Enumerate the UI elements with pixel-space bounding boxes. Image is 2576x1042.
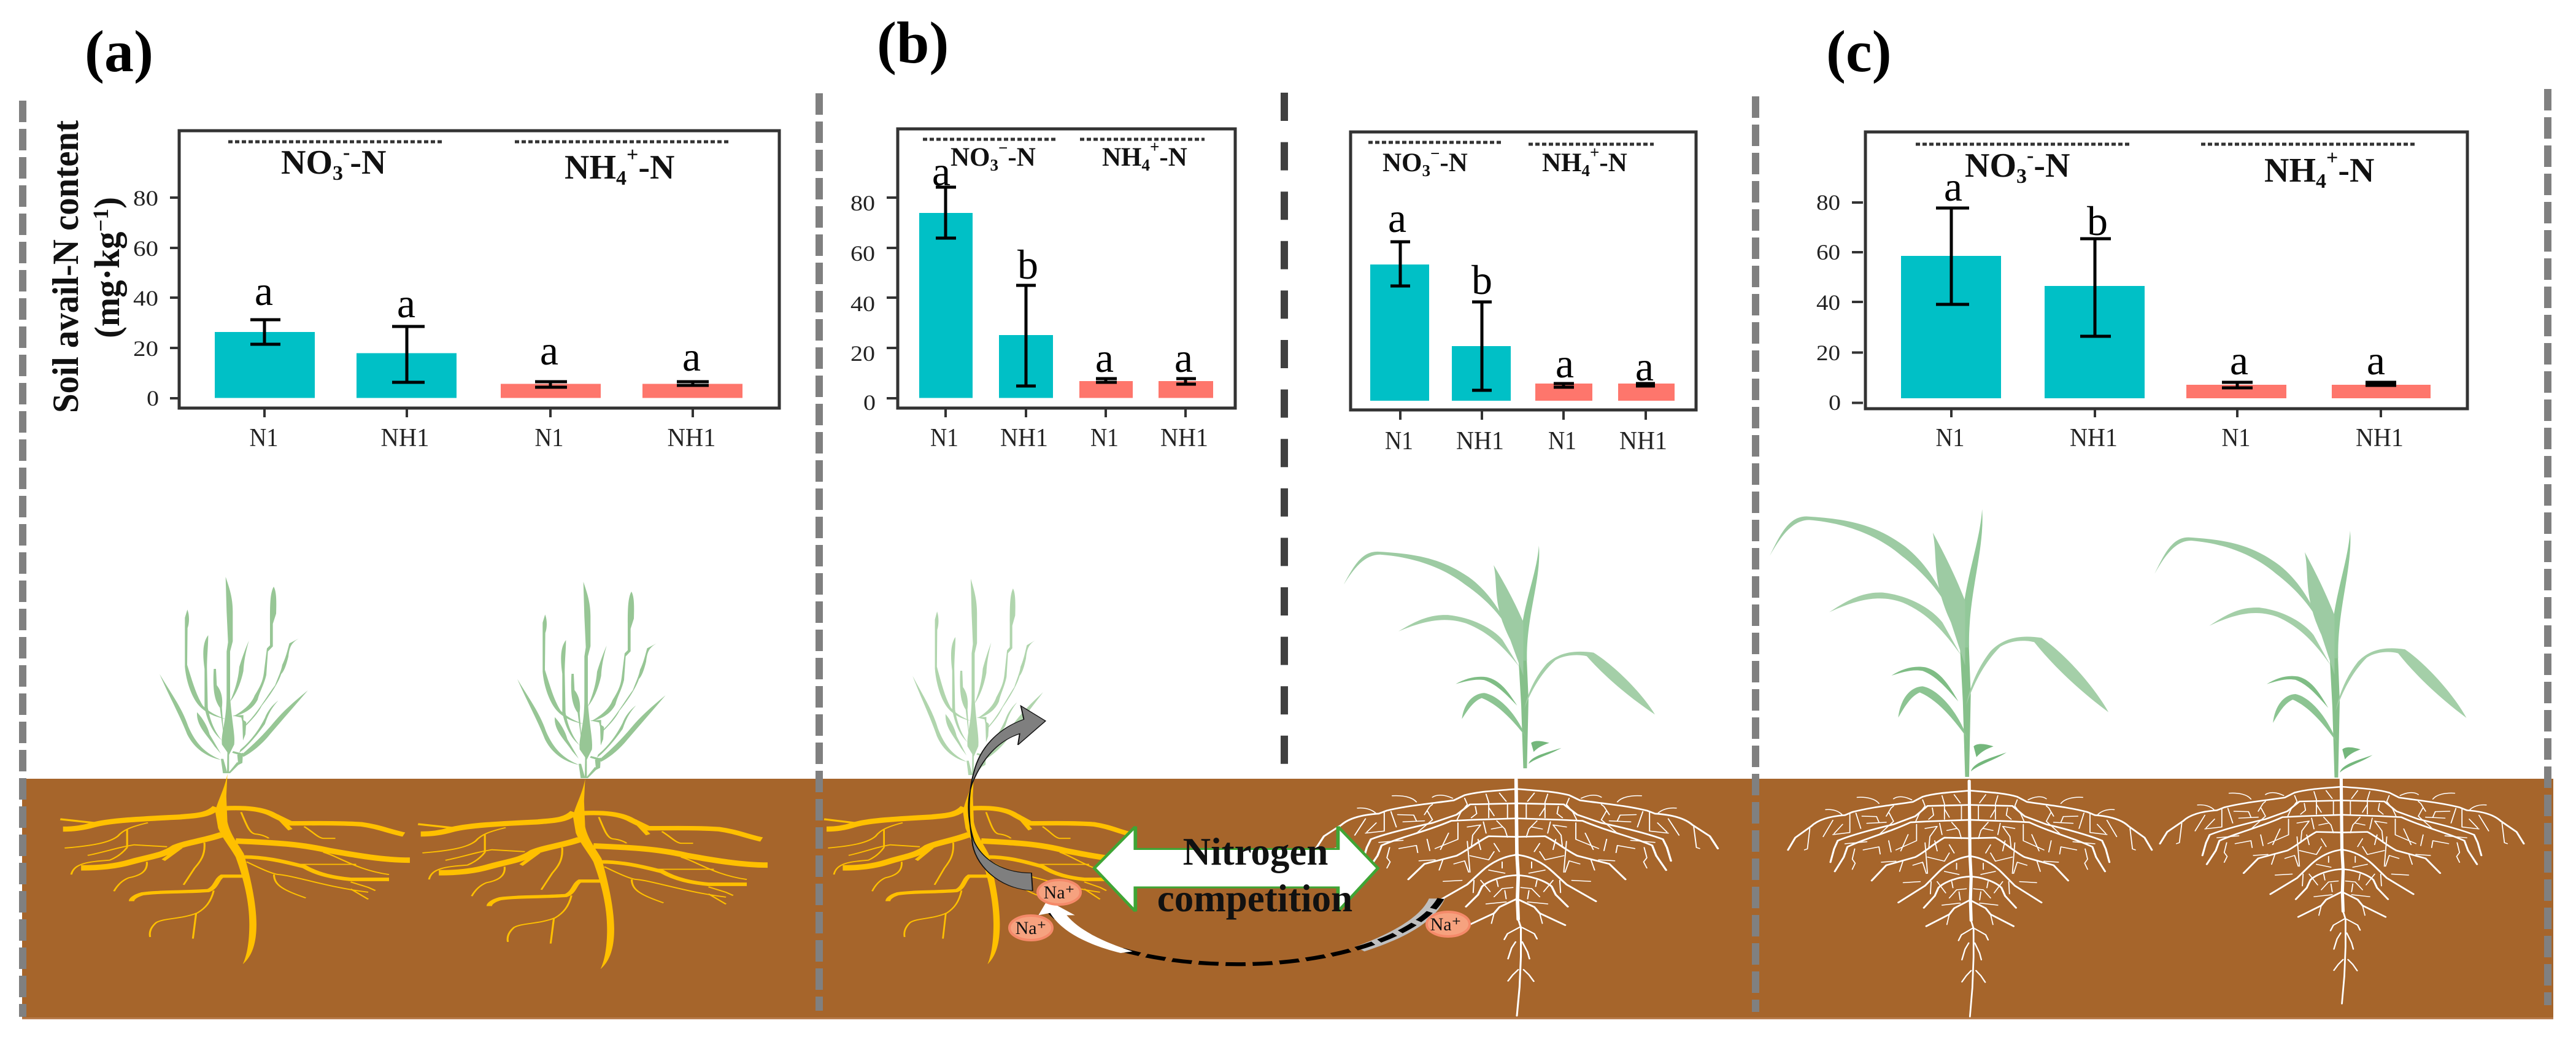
- bar chart: panel b right: [1351, 132, 1696, 455]
- y axis ticks and numbers: 60: [1816, 240, 1840, 264]
- group label: nitrate: NO: [1965, 147, 2016, 185]
- significance letters: [1944, 163, 2385, 384]
- y axis ticks and numbers: 60: [133, 236, 158, 261]
- y axis ticks and numbers: 20: [133, 336, 158, 361]
- plant: grass root left: [60, 774, 410, 964]
- significance letters: [1388, 195, 1654, 390]
- x axis ticks and labels: [249, 408, 715, 452]
- plant: maize root: [1316, 779, 1718, 1016]
- group label: nitrate: −: [998, 139, 1008, 157]
- group label: nitrate: 3: [2016, 165, 2027, 188]
- significance letters: a: [1388, 195, 1406, 241]
- group label: nitrate: NO: [281, 144, 333, 182]
- y axis ticks and numbers: 40: [1816, 290, 1840, 315]
- significance letters: b: [1017, 241, 1038, 288]
- panel c: maize plants: [1770, 509, 2524, 1017]
- group label: ammonium: -N: [1599, 149, 1627, 177]
- x axis ticks and labels: NH1: [1619, 427, 1667, 455]
- group label: ammonium: +: [1590, 143, 1599, 161]
- plant: maize shoot right: [2154, 531, 2467, 778]
- significance letters: a: [932, 148, 951, 195]
- significance letters: a: [1556, 340, 1574, 387]
- x axis ticks and labels: NH1: [380, 424, 430, 452]
- error bars: [1390, 242, 1655, 390]
- bar chart: panel b left: [850, 129, 1235, 452]
- y axis ticks and numbers: 0: [1829, 390, 1841, 415]
- x axis ticks and labels: N1: [1090, 424, 1119, 452]
- significance letters: a: [540, 327, 558, 374]
- group label: ammonium: NH: [1102, 143, 1141, 172]
- group label: ammonium: +: [1150, 137, 1159, 156]
- y axis ticks and numbers: 80: [850, 191, 875, 215]
- y axis ticks and numbers: 80: [1816, 190, 1840, 215]
- significance letters: a: [397, 280, 415, 326]
- x axis ticks and labels: N1: [930, 424, 958, 452]
- bars: [1370, 264, 1675, 401]
- plant: maize shoot: [1344, 546, 1655, 768]
- group label: ammonium: +: [627, 144, 638, 166]
- significance letters: a: [2367, 337, 2385, 384]
- arrow: sodium transfer dashed arc: [1038, 898, 1445, 964]
- plant: maize root right: [2160, 778, 2524, 1004]
- arrow: nitrogen competition double arrow: [1094, 827, 1378, 911]
- bar chart: panel c: [1816, 132, 2467, 452]
- significance letters: a: [1095, 334, 1114, 381]
- significance letters: a: [1635, 343, 1654, 390]
- callout: nitrogen competition text: [1157, 830, 1352, 920]
- bars: [1901, 256, 2431, 398]
- y axis ticks and numbers: [133, 186, 179, 411]
- group label: nitrate: -N: [2034, 147, 2070, 185]
- y axis ticks and numbers: 20: [1816, 341, 1840, 365]
- group label: nitrate: NO: [951, 143, 990, 172]
- plant: maize root left: [1788, 781, 2152, 1017]
- arrow: gray uptake arrow: [968, 706, 1046, 890]
- y axis title: ): [87, 197, 127, 209]
- y axis ticks and numbers: 20: [850, 341, 875, 366]
- plant: grass shoot: [912, 579, 1043, 775]
- heading: panel c: (c): [1826, 18, 1892, 84]
- panel b: grass and maize intercrop plants: [824, 546, 1718, 1016]
- error bars: [250, 320, 709, 387]
- bar chart: panel a: [133, 131, 779, 452]
- x axis ticks and labels: N1: [2221, 424, 2251, 452]
- y axis ticks and numbers: 0: [863, 390, 876, 415]
- plant: grass shoot right: [517, 582, 666, 778]
- heading: panel b: (b): [877, 10, 949, 75]
- bars: [215, 332, 742, 398]
- plant: grass shoot left: [160, 577, 308, 773]
- group label: ammonium: -N: [1159, 143, 1187, 172]
- x axis ticks and labels: NH1: [1000, 424, 1048, 452]
- group label: ammonium: 4: [1141, 156, 1150, 174]
- x axis ticks and labels: N1: [1935, 424, 1965, 452]
- y axis title: (mg·kg: [87, 230, 127, 338]
- x axis ticks and labels: NH1: [2356, 424, 2404, 452]
- significance letters: a: [1944, 163, 1962, 210]
- icon: sodium ion upper: [1038, 880, 1081, 905]
- group label: ammonium: NH: [1542, 149, 1582, 177]
- panel a: halophyte plants: [60, 577, 768, 969]
- group label: nitrate: -: [2027, 144, 2034, 167]
- icon: sodium ion lower: [1009, 916, 1052, 940]
- callout: nitrogen competition text: Nitrogen: [1183, 830, 1328, 873]
- group label: nitrate: 3: [333, 162, 343, 185]
- group label: ammonium: 4: [1582, 161, 1590, 180]
- group label: nitrate: -N: [1440, 149, 1468, 177]
- significance letters: a: [1174, 334, 1193, 381]
- significance letters: [932, 148, 1193, 381]
- significance letters: a: [2230, 337, 2248, 384]
- x axis ticks and labels: NH1: [668, 424, 715, 452]
- x axis ticks and labels: N1: [249, 424, 279, 452]
- group label: nitrate: -N: [1008, 143, 1036, 172]
- plant: grass root right: [418, 779, 768, 969]
- x axis ticks and labels: [1385, 410, 1667, 455]
- x axis ticks and labels: NH1: [1456, 427, 1504, 455]
- y axis ticks and numbers: 0: [147, 386, 159, 411]
- group label: ammonium: -N: [2338, 152, 2374, 190]
- y axis title: [45, 120, 127, 413]
- significance letters: b: [2087, 198, 2108, 244]
- error bars: [936, 187, 1196, 386]
- significance letters: b: [1471, 257, 1492, 303]
- soil layer: [22, 779, 2553, 1019]
- y axis title: −1: [88, 209, 113, 232]
- y axis ticks and numbers: 60: [850, 241, 875, 266]
- icon: sodium ion lower: Na⁺: [1016, 918, 1046, 938]
- significance letters: [255, 268, 701, 380]
- icon: sodium ion maize side: [1427, 912, 1470, 936]
- plant: grass root: [824, 774, 1137, 964]
- x axis ticks and labels: NH1: [1160, 424, 1208, 452]
- icon: sodium ion maize side: Na⁺: [1430, 914, 1461, 935]
- bars: [919, 213, 1213, 398]
- x axis ticks and labels: [1935, 409, 2404, 452]
- error bars: [1936, 208, 2396, 388]
- y axis ticks and numbers: 40: [850, 291, 875, 316]
- icon: sodium ion upper: Na⁺: [1044, 882, 1074, 903]
- group label: nitrate: -N: [350, 144, 386, 182]
- y axis ticks and numbers: 40: [133, 286, 158, 311]
- group label: ammonium: 4: [616, 167, 627, 190]
- group label: nitrate: 3: [1422, 161, 1430, 180]
- y axis ticks and numbers: [850, 191, 898, 415]
- y axis title: Soil avail-N content: [45, 120, 86, 413]
- callout: nitrogen competition text: competition: [1157, 877, 1352, 920]
- group label: ammonium: 4: [2316, 170, 2326, 193]
- y axis ticks and numbers: 80: [133, 186, 158, 210]
- group label: nitrate: -: [343, 141, 350, 164]
- x axis ticks and labels: NH1: [2070, 424, 2118, 452]
- x axis ticks and labels: N1: [1385, 427, 1413, 455]
- significance letters: a: [255, 268, 273, 314]
- group label: ammonium: +: [2326, 147, 2338, 169]
- group label: nitrate: −: [1430, 144, 1440, 163]
- group label: ammonium: NH: [2264, 152, 2316, 190]
- group label: ammonium: -N: [638, 149, 674, 187]
- x axis ticks and labels: [930, 408, 1208, 452]
- x axis ticks and labels: N1: [535, 424, 563, 452]
- heading: panel a: (a): [85, 18, 153, 84]
- group label: nitrate: 3: [990, 156, 998, 174]
- x axis ticks and labels: N1: [1548, 427, 1576, 455]
- significance letters: a: [682, 333, 701, 380]
- group label: ammonium: NH: [565, 149, 616, 187]
- group label: nitrate: NO: [1382, 149, 1422, 177]
- plant: maize shoot left: [1770, 509, 2108, 777]
- y axis ticks and numbers: [1816, 190, 1863, 415]
